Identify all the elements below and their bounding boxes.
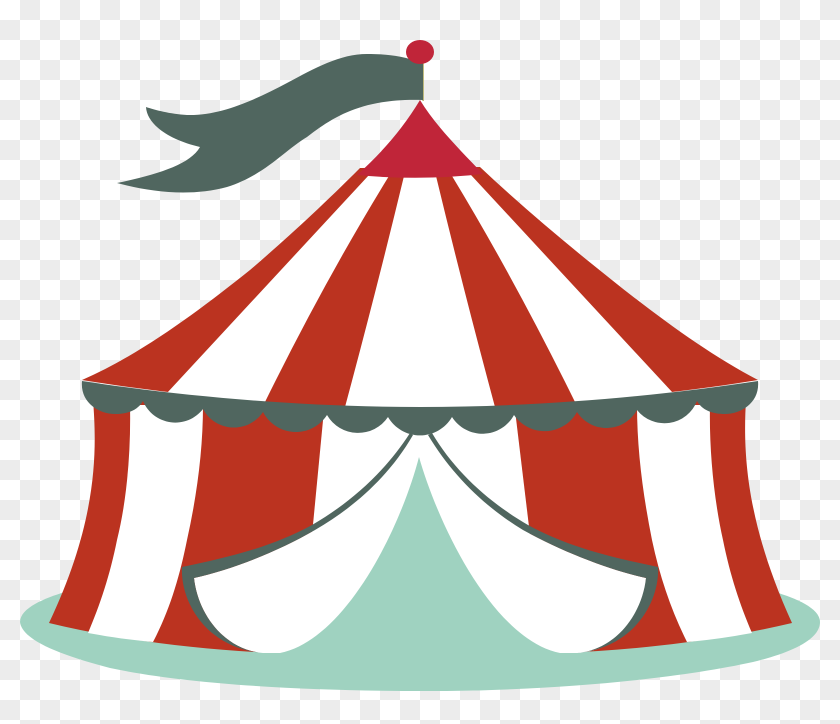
roof stripe: white centre (345, 176, 495, 407)
pole finial ball (406, 40, 434, 64)
ground ellipse (20, 592, 820, 691)
wall stripe: white far left (88, 405, 203, 642)
tent (49, 100, 792, 653)
tent wall: red base (49, 400, 792, 653)
tent doorway (280, 457, 560, 653)
roof stripe: white right (452, 175, 673, 402)
curtains: white panels (194, 435, 646, 653)
roof cap (357, 100, 483, 178)
flag (117, 54, 423, 193)
wall stripe: white far right (637, 405, 752, 642)
curtain tie: right (428, 433, 658, 653)
scalloped valance (82, 381, 758, 435)
wall stripe: white centre (312, 410, 530, 535)
curtain tie: left (182, 433, 413, 653)
roof stripe: white left (167, 175, 389, 402)
roof: red base (82, 167, 758, 407)
flag pole (422, 62, 424, 101)
